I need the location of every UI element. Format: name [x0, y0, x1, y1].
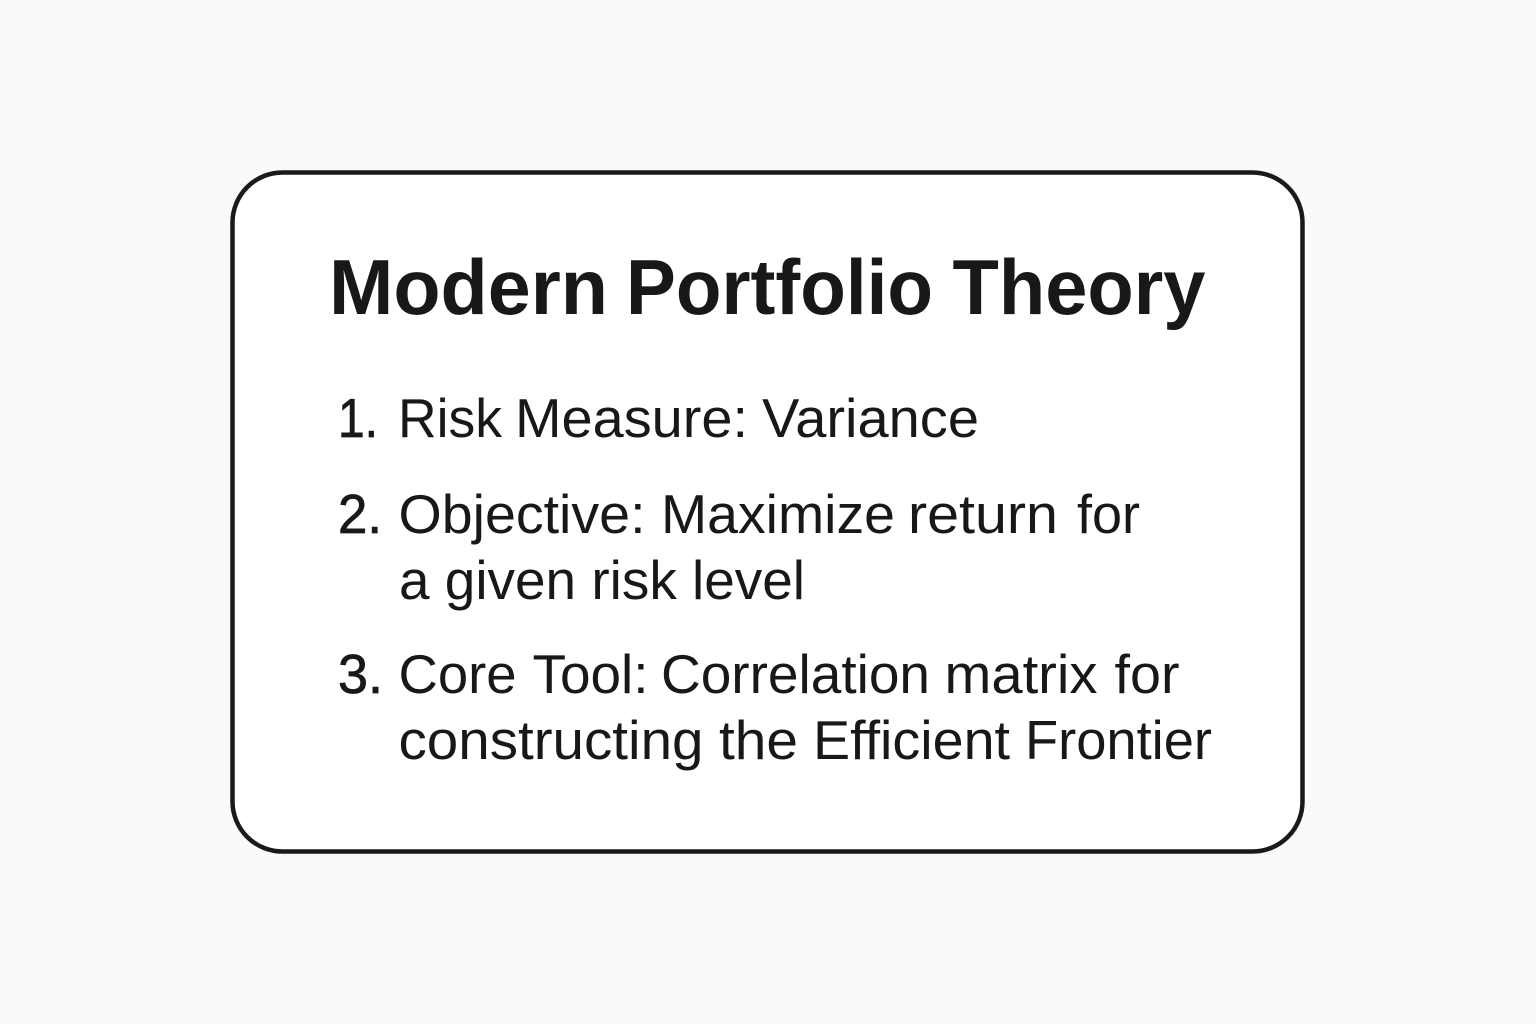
list item 3: core tool [338, 643, 1212, 771]
list item 3: core tool: matrix [944, 643, 1098, 705]
list item 3: core tool: Tool: [532, 643, 648, 705]
list item 1: risk measure [338, 387, 979, 449]
list item 2: objective: Objective: [398, 483, 646, 545]
list item 2: objective [338, 483, 1140, 611]
list item 2: objective: a given risk level [399, 549, 805, 611]
list item 2: objective: return [908, 483, 1058, 545]
title: Portfolio [626, 243, 933, 331]
list item 2: objective: for [1077, 483, 1140, 545]
list item 3: core tool: the [719, 709, 798, 771]
list item 1: risk measure: Measure: [515, 387, 748, 449]
list item 3: core tool: 3. [338, 643, 383, 705]
list item 3: core tool: Frontier [1025, 709, 1212, 771]
panel: Modern Portfolio Theory card [232, 172, 1302, 852]
title: Theory [952, 243, 1206, 331]
list item 3: core tool: Core [398, 643, 516, 705]
list item 3: core tool: Efficient [813, 709, 1010, 771]
list item 2: objective: 2. [338, 483, 382, 545]
list item 1: risk measure: 1. [338, 387, 378, 449]
title: Modern [329, 243, 608, 331]
list item 1: risk measure: Risk [398, 387, 502, 449]
list item 3: core tool: Correlation [661, 643, 930, 705]
list item 2: objective: Maximize [661, 483, 895, 545]
list item 3: core tool: constructing [398, 709, 704, 771]
list item 3: core tool: for [1114, 643, 1180, 705]
title [329, 243, 1206, 331]
list item 1: risk measure: Variance [762, 387, 979, 449]
